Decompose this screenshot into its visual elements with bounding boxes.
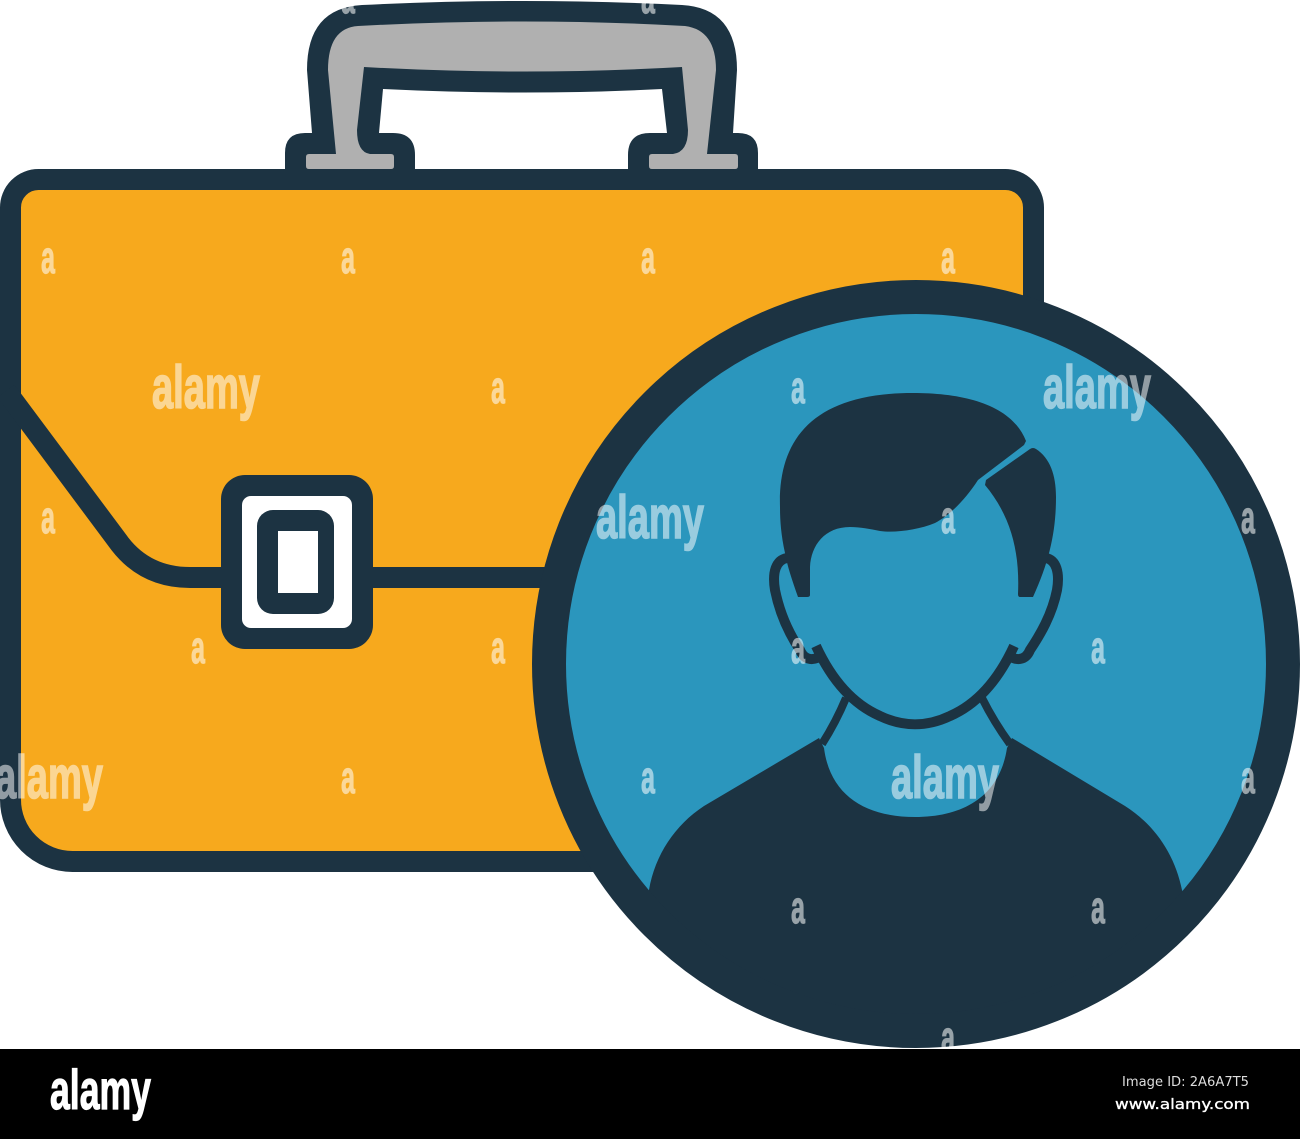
large watermarks [0, 354, 1151, 811]
small watermarks: a [641, 752, 655, 803]
small watermarks: a [341, 232, 355, 283]
small watermarks: a [491, 622, 505, 673]
small watermarks: a [941, 492, 955, 543]
small watermarks: a [491, 362, 505, 413]
small watermarks: a [1091, 882, 1105, 933]
small watermarks: a [191, 622, 205, 673]
small watermarks: a [1241, 492, 1255, 543]
footer logo text: alamy [50, 1058, 151, 1121]
large watermarks: alamy [152, 354, 260, 421]
small watermarks: a [41, 492, 55, 543]
small watermarks: a [941, 232, 955, 283]
avatar shirt [646, 738, 1185, 1022]
small watermarks: a [641, 232, 655, 283]
small watermarks: a [791, 362, 805, 413]
footer bar [0, 1049, 1300, 1139]
small watermarks: a [941, 1012, 955, 1063]
icon: briefcase clasp [221, 475, 373, 649]
small watermarks: a [791, 882, 805, 933]
footer url: www.alamy.com [1115, 1097, 1250, 1113]
small watermarks: a [791, 622, 805, 673]
small watermarks: a [341, 752, 355, 803]
avatar neck lines [822, 698, 1010, 744]
small watermarks: a [1241, 752, 1255, 803]
footer image ID: Image ID: 2A6A7T5 [1122, 1074, 1249, 1090]
small watermarks: a [41, 232, 55, 283]
large watermarks: alamy [1043, 354, 1151, 421]
icon: person avatar circle [549, 297, 1283, 1031]
icon: briefcase body [6, 180, 1034, 862]
large watermarks: alamy [596, 484, 704, 551]
icon: briefcase handle [285, 1, 758, 172]
avatar ring [549, 297, 1283, 1031]
small watermarks: a [1091, 622, 1105, 673]
large watermarks: alamy [0, 744, 103, 811]
avatar hair [780, 393, 1026, 597]
avatar ears and jaw [774, 558, 1058, 724]
large watermarks: alamy [891, 744, 999, 811]
